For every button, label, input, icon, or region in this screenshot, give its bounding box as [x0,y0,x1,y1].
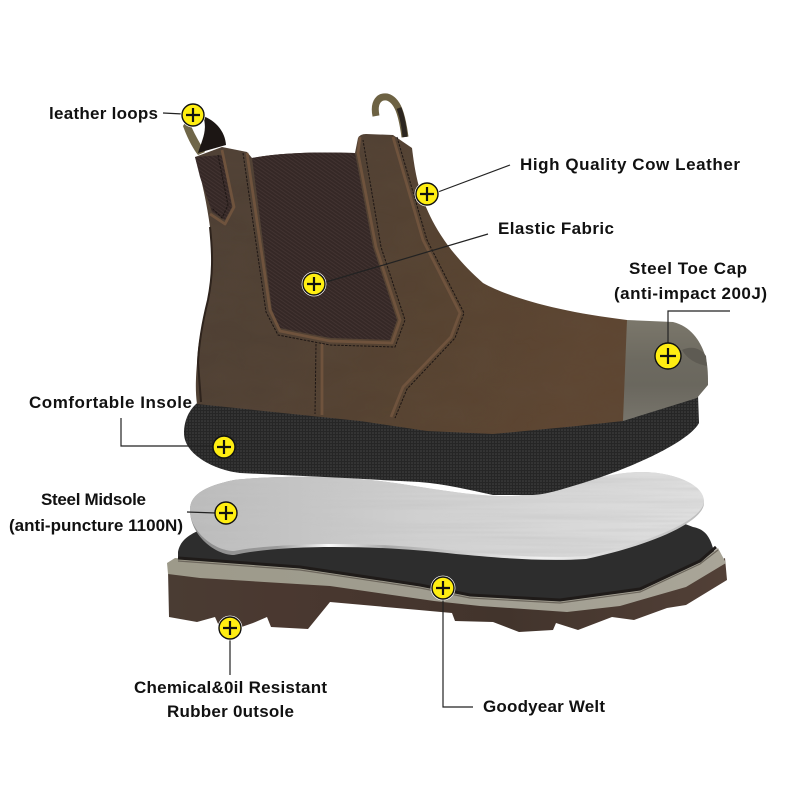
leader: comfortable insole [121,418,214,446]
label: rubber outsole: Chemical&0il Resistant [134,678,327,697]
steel midsole [190,472,704,560]
leader: leather loops [163,113,183,114]
label: rubber outsole: Rubber 0utsole [167,702,294,721]
leader: steel toe cap [668,311,730,344]
marker: leather loops [181,103,205,127]
label: goodyear welt: Goodyear Welt [483,697,605,716]
marker: cow leather [415,182,439,206]
marker: steel midsole [215,502,237,524]
left pull loop [183,116,226,155]
leader: elastic fabric [326,234,488,282]
welt stitching [178,547,718,603]
marker: elastic fabric [302,272,326,296]
label: elastic fabric: Elastic Fabric [498,219,614,238]
leader: cow leather [438,165,510,192]
back seams [210,150,234,224]
label: high quality cow leather: High Quality Cow Leather [520,155,740,174]
illustration: exploded boot [167,97,727,632]
leader: rubber outsole [229,638,231,675]
label: leather loops: leather loops [49,104,158,123]
label: steel toe cap: (anti-impact 200J) [614,284,767,303]
marker: rubber outsole [218,616,242,640]
label: rubber outsole [134,678,327,721]
back gore [195,155,232,220]
marker: steel toe cap [655,343,681,369]
marker: goodyear welt [431,576,455,600]
label: comfortable insole: Comfortable Insole [29,393,192,412]
outsole footbed [178,522,716,606]
right pull loop [375,97,405,137]
right side seam [391,137,460,417]
steel toe cap [623,320,708,421]
label: steel midsole [9,490,183,535]
elastic fabric panel [252,153,397,340]
welt band [167,548,726,612]
comfortable insole [184,390,699,495]
rubber outsole lugs [168,558,727,632]
leader: goodyear welt [443,598,473,707]
label: steel midsole: (anti-puncture 1100N) [9,516,183,535]
leather upper [195,134,640,434]
marker: comfortable insole [213,436,235,458]
label: steel toe cap: Steel Toe Cap [629,259,747,278]
label: steel toe cap [614,259,767,303]
leader: steel midsole [187,512,216,513]
label: steel midsole: Steel Midsole [41,490,146,509]
panel seam [247,137,400,343]
